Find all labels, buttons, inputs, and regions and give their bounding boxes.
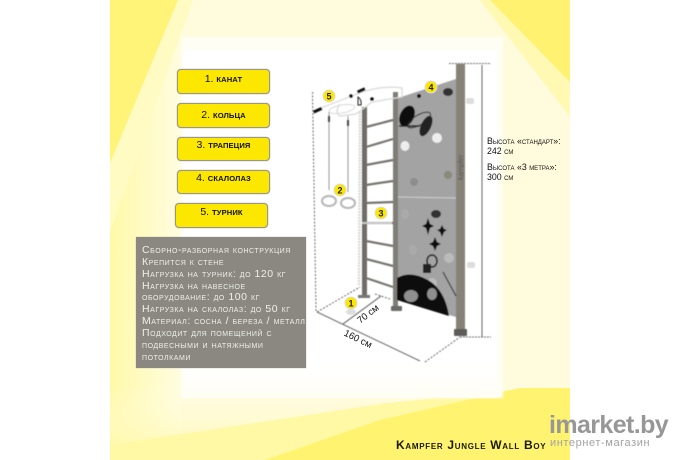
button: 5. турник	[175, 203, 268, 228]
button: 4. скалолаз	[177, 170, 270, 194]
caption: product name: Kampfer Jungle Wall Boy	[396, 438, 546, 452]
ground ring of rope	[346, 309, 356, 315]
wall bars ladder	[358, 107, 393, 298]
button: 5. турник: 5. ТУРНИК	[200, 206, 243, 218]
climbing rope	[359, 112, 360, 286]
climbing wall panel: kampfer	[458, 154, 465, 180]
badge: 5: 5	[326, 92, 332, 102]
label: height 3 metres	[487, 162, 557, 182]
panel: specifications: Материал: сосна / береза / металл	[142, 315, 305, 327]
button: 3. трапеция	[177, 137, 270, 161]
panel: specifications: Нагрузка на навесное	[142, 280, 246, 292]
badge: 3: 3	[378, 208, 384, 218]
watermark: imarket.by: интернет-магазин	[550, 437, 650, 449]
badge: 4	[425, 81, 437, 93]
button: 2. кольца	[177, 103, 270, 128]
trapeze bar	[362, 222, 392, 224]
label: height 3 metres: 300 см	[487, 172, 513, 182]
badge: 1	[345, 297, 357, 309]
panel: specifications: Нагрузка на турник: до 120 кг	[142, 268, 286, 280]
button: 2. кольца: 2. КОЛЬЦА	[201, 109, 246, 121]
badge: 3	[375, 207, 387, 219]
pull-up bar	[313, 87, 402, 116]
panel: specifications: Подходит для помещений с	[142, 327, 272, 339]
badge: 2	[334, 184, 346, 196]
panel: specifications: потолками	[142, 351, 191, 363]
dimension lines	[312, 64, 491, 362]
label: 160 cm: 160 см	[342, 328, 374, 351]
label: height standard	[487, 136, 561, 156]
climbing wall panel	[391, 64, 475, 336]
panel: specifications: подвесными и натяжными	[142, 339, 263, 351]
gymnastic rings	[322, 112, 355, 208]
badge: 2: 2	[337, 186, 343, 196]
button: 1. канат: 1. КАНАТ	[205, 73, 242, 85]
badge: 1: 1	[348, 298, 354, 308]
button: 3. трапеция: 3. ТРАПЕЦИЯ	[197, 139, 250, 151]
label: height 3 metres: Высота «3 метра»:	[487, 162, 557, 172]
label: height standard: 242 см	[487, 146, 513, 156]
badge: 5	[323, 90, 335, 102]
button: 4. скалолаз: 4. СКАЛОЛАЗ	[196, 172, 251, 184]
badge: 4: 4	[428, 82, 434, 92]
panel: specifications: оборудование: до 100 кг	[142, 291, 260, 303]
button: 1. канат	[177, 69, 270, 94]
background: yellow ray panel	[110, 0, 570, 460]
wall artwork: planets, rocket, astronaut, holds	[396, 88, 456, 316]
panel: specifications: Крепится к стене	[142, 256, 224, 268]
watermark: imarket.by: imarket.by	[549, 411, 668, 439]
panel: specifications: Нагрузка на скалолаз: до 50 кг	[142, 303, 291, 315]
label: height standard: Высота «стандарт»:	[487, 136, 561, 146]
label: 70 cm: 70 см	[355, 303, 381, 326]
panel: specifications	[136, 237, 306, 368]
panel: specifications: Сборно-разборная конструкция	[142, 244, 291, 256]
